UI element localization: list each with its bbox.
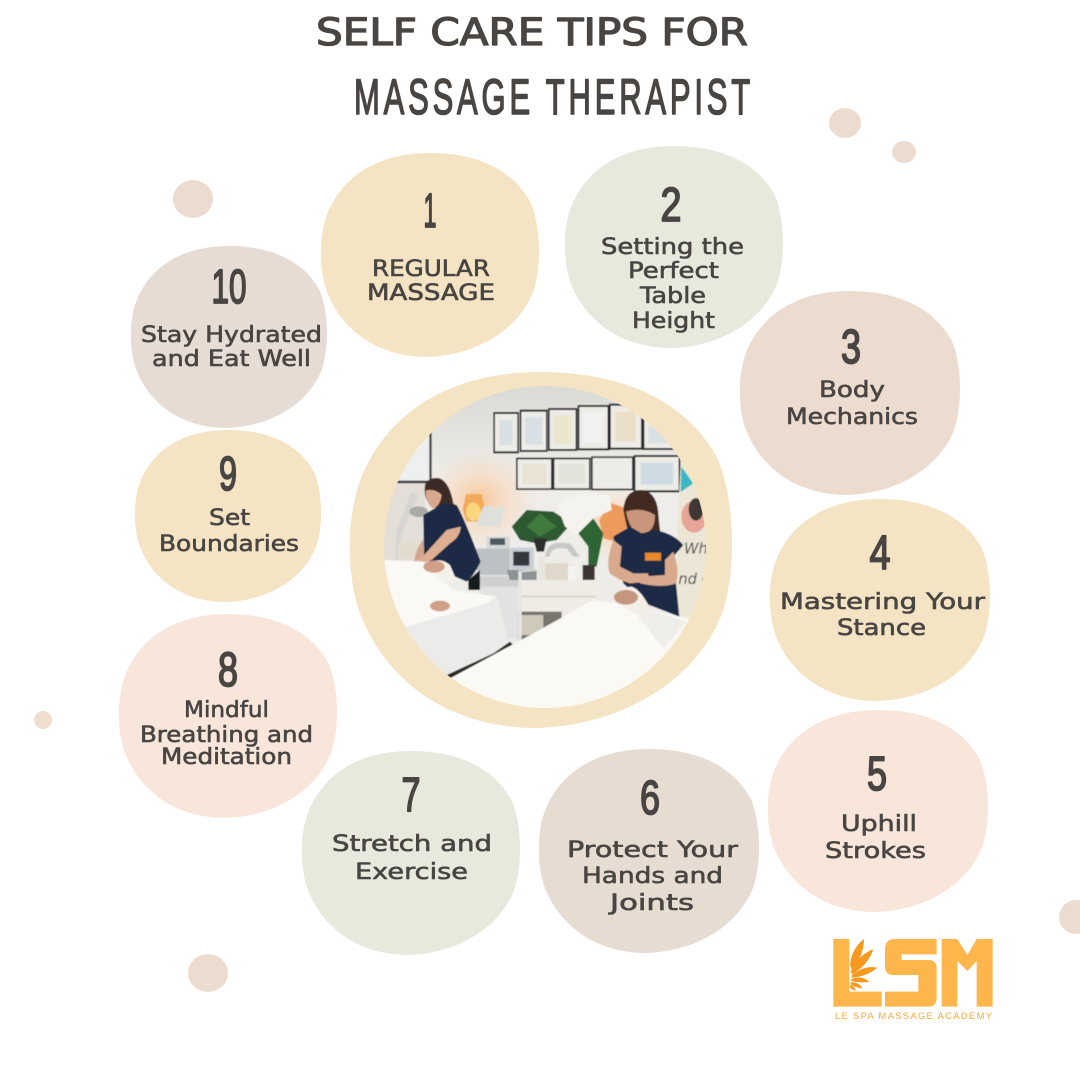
tip 6: protect your hands and joints: 6 <box>640 772 660 825</box>
tip 10: stay hydrated and eat well: and Eat Well <box>152 347 311 372</box>
tip 2: setting the perfect table height: Height <box>632 309 715 334</box>
logo letter M <box>942 939 993 1007</box>
lamp stand left <box>395 492 418 560</box>
decorative dot top right large <box>829 108 861 138</box>
left lamp <box>463 494 485 522</box>
tip 5: uphill strokes: Strokes <box>825 839 926 864</box>
tip 4: mastering your stance: Mastering Your <box>780 590 986 615</box>
machines <box>477 548 510 575</box>
tip 5: uphill strokes <box>768 710 988 912</box>
decorative dot right edge <box>1059 900 1080 934</box>
tip 4: mastering your stance: Stance <box>837 616 926 641</box>
orchids <box>560 494 612 532</box>
tip 4: mastering your stance: 4 <box>870 527 890 580</box>
tip 3: body mechanics <box>740 291 960 495</box>
counter <box>480 575 518 638</box>
tip 9: set boundaries: Boundaries <box>159 532 299 557</box>
tip 7: stretch and exercise <box>302 751 520 955</box>
tip 2: setting the perfect table height: Perfect <box>628 259 719 284</box>
tip 7: stretch and exercise: 7 <box>402 769 420 822</box>
tip 7: stretch and exercise: Exercise <box>355 860 468 885</box>
bed right <box>450 600 688 708</box>
tip 5: uphill strokes: Uphill <box>841 812 917 837</box>
tip 8: mindful breathing and meditation: Meditation <box>161 745 292 770</box>
decorative dot left <box>34 711 52 729</box>
tip 6: protect your hands and joints: Protect Your <box>567 838 739 863</box>
plant <box>512 510 572 543</box>
right lamp <box>599 503 627 542</box>
tip 1: regular massage <box>321 153 539 357</box>
bottles <box>538 557 544 580</box>
tip 3: body mechanics: Body <box>819 378 885 403</box>
tip 8: mindful breathing and meditation: Breathing and <box>140 723 313 748</box>
tip 8: mindful breathing and meditation: Mindful <box>184 698 269 723</box>
tip 1: regular massage: MASSAGE <box>367 281 495 306</box>
cart <box>518 580 602 612</box>
tip 3: body mechanics: 3 <box>841 321 861 374</box>
tip 6: protect your hands and joints: Hands and <box>582 864 723 889</box>
tip 4: mastering your stance <box>770 499 990 701</box>
banner <box>676 463 706 616</box>
decorative dot bottom left <box>188 954 228 992</box>
decorative dot top right small <box>892 141 916 163</box>
mirror <box>397 432 432 484</box>
tip 2: setting the perfect table height: 2 <box>660 179 682 232</box>
tip 9: set boundaries: 9 <box>219 448 237 501</box>
logo: LSM Le Spa Massage Academy: LE SPA MASSAGE ACADEMY <box>835 1011 993 1022</box>
tip 2: setting the perfect table height <box>565 146 783 348</box>
central photo: massage room: nd o <box>678 571 711 588</box>
tip 3: body mechanics: Mechanics <box>786 405 918 430</box>
title: MASSAGE THERAPIST <box>354 68 750 125</box>
tip 10: stay hydrated and eat well: 10 <box>212 261 246 314</box>
tip 1: regular massage: 1 <box>424 185 436 238</box>
central photo: massage room: When <box>684 540 726 557</box>
logo letter L <box>833 939 882 1007</box>
therapist left <box>425 478 458 510</box>
central photo ring <box>350 372 732 728</box>
tip 8: mindful breathing and meditation <box>119 614 337 818</box>
decorative dot top left <box>173 180 213 218</box>
bed left <box>481 598 506 637</box>
tip 10: stay hydrated and eat well: Stay Hydrated <box>141 323 322 348</box>
tip 10: stay hydrated and eat well <box>131 246 327 428</box>
title <box>316 11 750 125</box>
logo lotus petals <box>850 939 877 991</box>
certificates <box>493 404 680 492</box>
tip 7: stretch and exercise: Stretch and <box>332 832 492 857</box>
title: SELF CARE TIPS FOR <box>316 11 748 54</box>
tip 9: set boundaries <box>135 430 321 602</box>
tip 2: setting the perfect table height: Table <box>639 284 706 309</box>
therapist right <box>622 490 661 534</box>
tip 2: setting the perfect table height: Setting the <box>601 235 744 260</box>
tip 6: protect your hands and joints <box>539 749 759 953</box>
tip 8: mindful breathing and meditation: 8 <box>218 644 238 697</box>
central photo: massage room <box>384 386 706 708</box>
logo letter S <box>885 939 937 1007</box>
tip 1: regular massage: REGULAR <box>372 257 490 282</box>
tip 9: set boundaries: Set <box>209 506 250 531</box>
tip 5: uphill strokes: 5 <box>867 748 887 801</box>
logo: LSM Le Spa Massage Academy <box>833 939 993 1022</box>
tip 6: protect your hands and joints: Joints <box>607 891 694 916</box>
